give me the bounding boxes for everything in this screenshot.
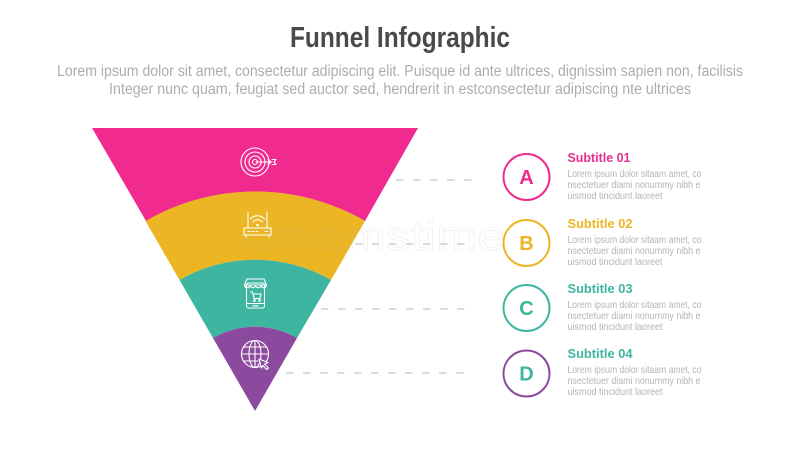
body text C: uismod tincidunt laoreet xyxy=(568,322,663,333)
body text A: nsectetuer diami nonummy nibh e xyxy=(568,180,701,191)
funnel segment: purple xyxy=(213,327,297,411)
intro text: Lorem ipsum dolor sit amet, consectetur adipiscing elit. Puisque id ante ultrices, dignissim sapien non, facilisis xyxy=(57,63,743,80)
funnel segment: pink xyxy=(92,128,418,221)
intro text xyxy=(57,63,743,98)
body text C: Lorem ipsum dolor sitaam amet, co xyxy=(568,300,702,311)
watermark: dreamstime xyxy=(245,212,505,259)
icon: mobile shop xyxy=(244,279,266,308)
badge C xyxy=(504,285,550,331)
item A xyxy=(504,151,702,202)
badge B xyxy=(504,220,550,266)
icon: wifi router xyxy=(244,212,271,237)
item C xyxy=(504,282,702,333)
item D xyxy=(504,347,702,398)
body text B: Lorem ipsum dolor sitaam amet, co xyxy=(568,235,702,246)
item B xyxy=(504,217,702,268)
badge B: B xyxy=(519,233,534,255)
funnel segment: teal xyxy=(180,260,331,338)
badge C: C xyxy=(519,298,534,320)
body text D: Lorem ipsum dolor sitaam amet, co xyxy=(568,365,702,376)
subtitle 04: Subtitle 04 xyxy=(568,347,633,361)
subtitle 03: Subtitle 03 xyxy=(568,282,633,296)
funnel segment: yellow xyxy=(146,192,365,280)
icon: target with arrow xyxy=(241,148,276,176)
subtitle 01: Subtitle 01 xyxy=(568,151,631,165)
intro text: Integer nunc quam, feugiat sed auctor sed, hendrerit in estconsectetur adipiscing nte ultrices xyxy=(109,81,691,98)
body text D: nsectetuer diami nonummy nibh e xyxy=(568,376,701,387)
funnel xyxy=(92,128,418,411)
title: Funnel Infographic xyxy=(290,22,510,54)
badge D: D xyxy=(519,364,534,386)
body text D: uismod tincidunt laoreet xyxy=(568,387,663,398)
body text C: nsectetuer diami nonummy nibh e xyxy=(568,311,701,322)
body text B xyxy=(568,235,702,268)
body text C xyxy=(568,300,702,333)
subtitle 02: Subtitle 02 xyxy=(568,217,633,231)
body text A: Lorem ipsum dolor sitaam amet, co xyxy=(568,169,702,180)
badge D xyxy=(504,350,550,396)
badge A xyxy=(504,154,550,200)
connector lines xyxy=(286,180,474,373)
icon: globe with cursor xyxy=(242,340,268,370)
body text A xyxy=(568,169,702,202)
body text B: uismod tincidunt laoreet xyxy=(568,257,663,268)
body text B: nsectetuer diami nonummy nibh e xyxy=(568,246,701,257)
body text A: uismod tincidunt laoreet xyxy=(568,191,663,202)
body text D xyxy=(568,365,702,398)
badge A: A xyxy=(519,167,534,189)
